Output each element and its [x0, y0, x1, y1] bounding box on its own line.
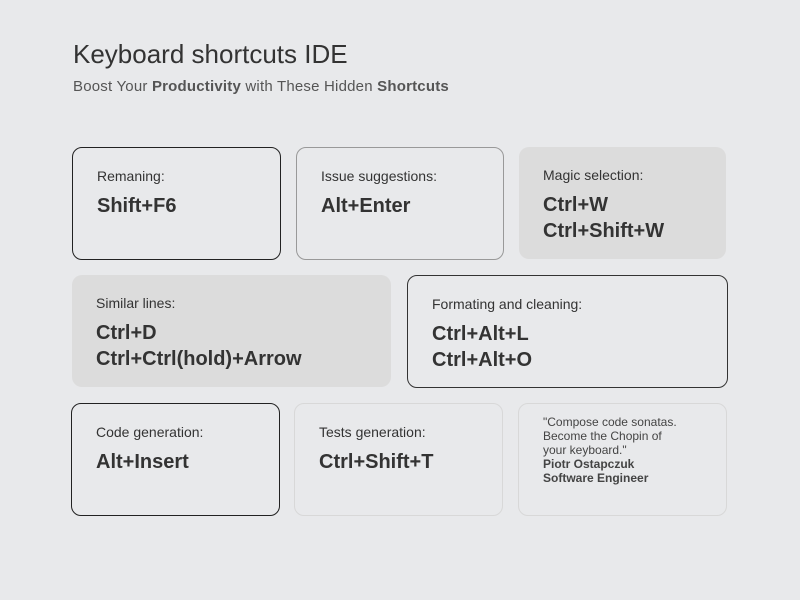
card: quote: your keyboard." [543, 443, 627, 457]
card: code generation [71, 403, 280, 516]
card: renaming: Shift+F6 [97, 195, 176, 217]
card: magic selection: Magic selection: [543, 167, 643, 183]
card: quote: Become the Chopin of [543, 429, 662, 443]
card: quote: Piotr Ostapczuk [543, 457, 634, 471]
card: formatting: Ctrl+Alt+O [432, 349, 532, 371]
card: tests generation: Tests generation: [319, 424, 426, 440]
card: quote: Software Engineer [543, 471, 648, 485]
card: tests generation: Ctrl+Shift+T [319, 451, 433, 473]
card: magic selection: Ctrl+W [543, 194, 608, 216]
subtitle: Boost Your Productivity with These Hidden Shortcuts [73, 78, 449, 95]
title: Keyboard shortcuts IDE [73, 39, 348, 69]
card: formatting: Ctrl+Alt+L [432, 323, 529, 345]
card: formatting: Formating and cleaning: [432, 296, 582, 312]
card: renaming: Remaning: [97, 168, 165, 184]
card: similar lines: Ctrl+Ctrl(hold)+Arrow [96, 348, 302, 370]
card: issue suggestions: Alt+Enter [321, 195, 410, 217]
card: formatting [407, 275, 728, 388]
card: issue suggestions: Issue suggestions: [321, 168, 437, 184]
card: similar lines [72, 275, 391, 387]
card: renaming [72, 147, 281, 260]
card: similar lines: Ctrl+D [96, 322, 157, 344]
card: magic selection: Ctrl+Shift+W [543, 220, 664, 242]
card: similar lines: Similar lines: [96, 295, 175, 311]
card: quote: "Compose code sonatas. [543, 415, 677, 429]
card: code generation: Alt+Insert [96, 451, 189, 473]
card: magic selection [519, 147, 726, 259]
card: tests generation [294, 403, 503, 516]
card: issue suggestions [296, 147, 504, 260]
card: code generation: Code generation: [96, 424, 203, 440]
card: quote [518, 403, 727, 516]
